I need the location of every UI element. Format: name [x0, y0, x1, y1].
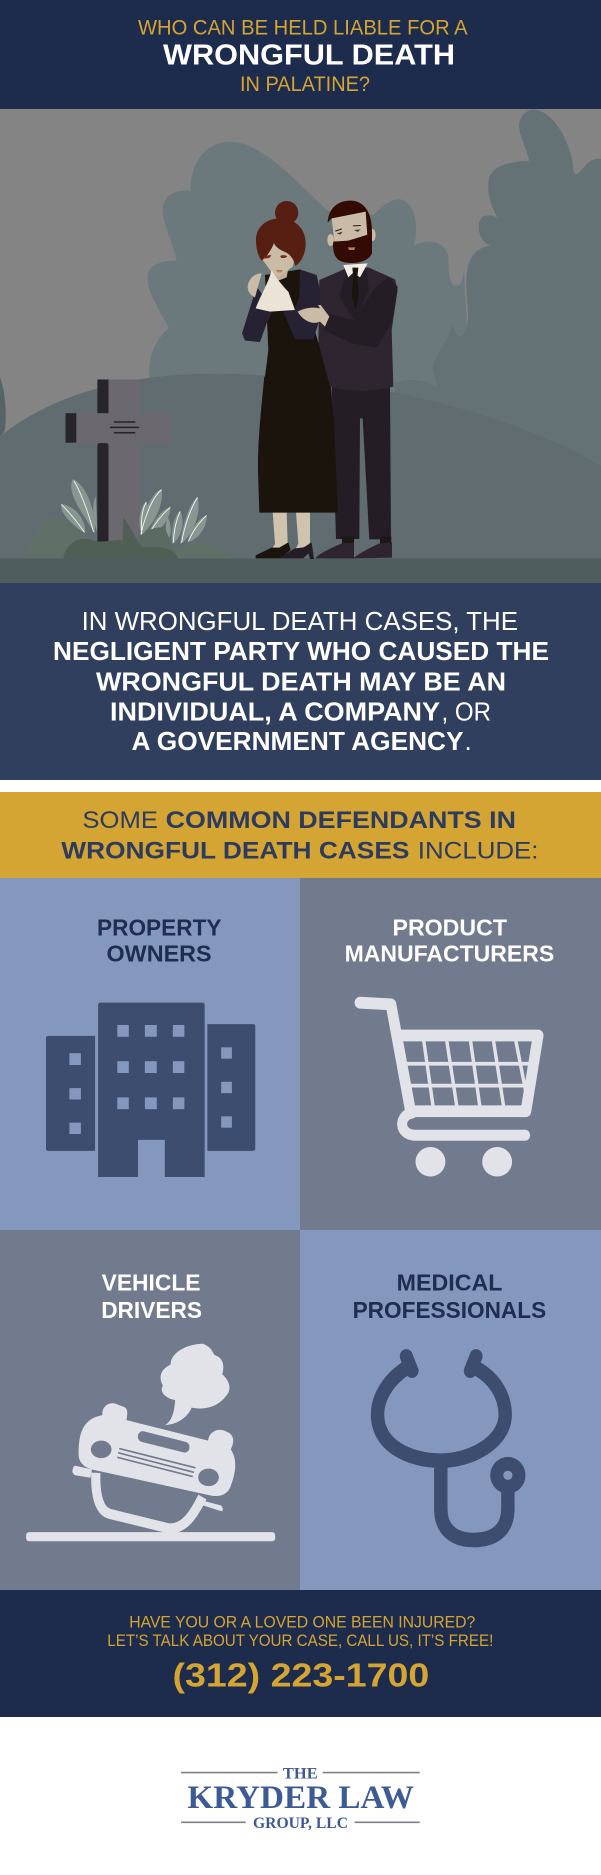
logo: The Kryder Law Group, LLC: THE — [283, 1766, 318, 1782]
illustration: grieving couple lower body — [256, 377, 392, 559]
heading: vehicle drivers: VEHICLE — [102, 1269, 200, 1295]
panel: defendants heading — [0, 792, 601, 878]
illustration: hill — [0, 374, 601, 560]
panel: vehicle drivers — [0, 1230, 300, 1590]
illustration: background trees — [0, 110, 601, 479]
title: location line: IN PALATINE? — [240, 72, 370, 96]
illustration: plant leaves — [61, 479, 207, 544]
heading line 1: SOME — [82, 807, 158, 834]
icon: stone cross — [66, 379, 170, 544]
logo: The Kryder Law Group, LLC: KRYDER LAW — [187, 1780, 414, 1816]
title: eyebrow line: WHO CAN BE HELD LIABLE FOR A — [138, 16, 468, 40]
heading: vehicle drivers: DRIVERS — [101, 1296, 202, 1322]
panel: graveside illustration — [0, 109, 601, 583]
heading line 2: WRONGFUL DEATH CASES — [61, 837, 409, 864]
illustration: ground — [0, 558, 601, 583]
logo: The Kryder Law Group, LLC — [0, 1717, 601, 1875]
icon: shopping cart — [360, 1003, 538, 1177]
illustration: grieving couple upper body — [242, 201, 398, 391]
logo: The Kryder Law Group, LLC: GROUP, LLC — [253, 1815, 348, 1832]
text line 4: INDIVIDUAL, A COMPANY — [110, 698, 440, 726]
heading: medical professionals: MEDICAL — [397, 1269, 503, 1295]
heading line 1: COMMON DEFENDANTS IN — [166, 807, 516, 834]
illustration: low bushes — [23, 516, 236, 558]
heading: property owners — [97, 914, 222, 966]
panel: product manufacturers — [300, 878, 601, 1230]
heading: medical professionals: PROFESSIONALS — [353, 1296, 546, 1322]
heading: property owners: PROPERTY — [97, 914, 222, 940]
text line 1: IN WRONGFUL DEATH CASES, THE — [82, 608, 518, 636]
panel: title header — [0, 0, 601, 109]
text: question line: HAVE YOU OR A LOVED ONE BEEN INJURED? — [129, 1613, 475, 1631]
text: phone number: (312) 223-1700 — [172, 1657, 429, 1694]
panel: call to action — [0, 1590, 601, 1717]
text line 5: . — [464, 728, 472, 756]
text line 4: , OR — [442, 698, 491, 726]
heading: vehicle drivers — [101, 1269, 202, 1322]
text line 5: A GOVERNMENT AGENCY — [132, 728, 464, 756]
heading line 2 — [61, 837, 539, 864]
icon: stethoscope — [378, 1356, 526, 1540]
heading: product manufacturers: MANUFACTURERS — [345, 940, 554, 966]
text line 2: NEGLIGENT PARTY WHO CAUSED THE — [53, 638, 549, 666]
text line 3: WRONGFUL DEATH MAY BE AN — [96, 668, 506, 696]
text: call line: LET’S TALK ABOUT YOUR CASE, CALL US, IT’S FREE! — [107, 1632, 493, 1650]
heading: property owners: OWNERS — [106, 940, 212, 966]
icon: office buildings — [46, 1003, 255, 1177]
heading: product manufacturers: PRODUCT — [392, 914, 508, 940]
panel: negligent party statement — [0, 583, 601, 780]
icon: overturned car with smoke — [26, 1343, 275, 1541]
heading: product manufacturers — [345, 914, 554, 966]
heading line 2: INCLUDE: — [418, 837, 538, 864]
title: main line: WRONGFUL DEATH — [163, 39, 455, 71]
illustration: front bush — [63, 517, 178, 558]
panel: property owners — [0, 878, 300, 1230]
panel: medical professionals — [300, 1230, 601, 1590]
heading: medical professionals — [353, 1269, 546, 1322]
